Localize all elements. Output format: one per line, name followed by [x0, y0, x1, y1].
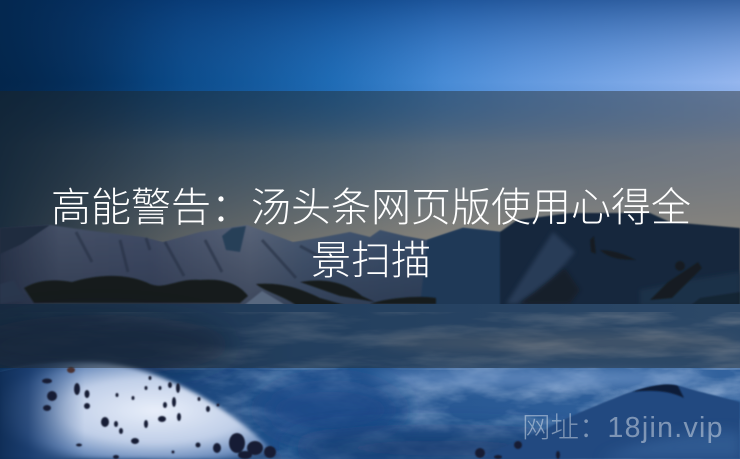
right foreground hill [480, 384, 740, 459]
snow spur [238, 291, 296, 318]
sky [0, 0, 740, 310]
trees on the hill [42, 367, 560, 459]
cloud sea [0, 304, 740, 459]
mountain range [0, 213, 740, 306]
right dark range [500, 213, 740, 306]
dark rock bands [24, 276, 436, 308]
dark translucent band [0, 91, 740, 368]
left snowy range [0, 225, 500, 306]
title: 高能警告：汤头条网页版使用心得全景扫描 [51, 186, 691, 283]
watermark: 网址：18jin.vip [522, 412, 724, 444]
left foreground snow hill [0, 362, 282, 459]
